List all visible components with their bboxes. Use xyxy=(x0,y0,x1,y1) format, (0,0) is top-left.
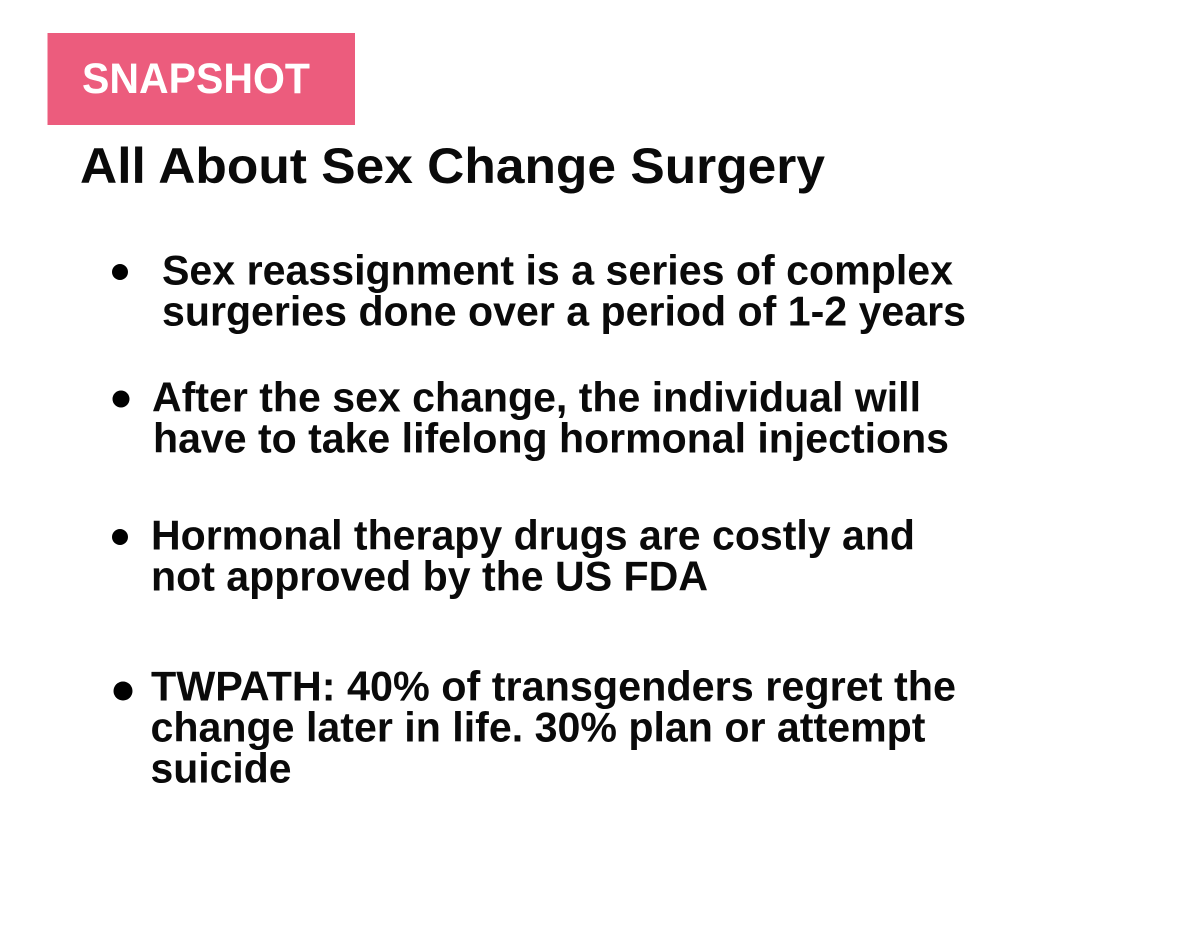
bullet point: TWPATH statistics: TWPATH: 40% of transgenders regret the xyxy=(151,662,956,710)
badge: snapshot: SNAPSHOT xyxy=(82,55,310,103)
bullet point: hormonal therapy drugs: not approved by the US FDA xyxy=(151,552,708,600)
bullet point: TWPATH statistics: change later in life. 30% plan or attempt xyxy=(150,704,926,750)
bullet point: lifelong hormonal injections xyxy=(112,374,949,462)
title: All About Sex Change Surgery xyxy=(80,138,825,194)
bullet point: lifelong hormonal injections: have to take lifelong hormonal injections xyxy=(153,414,949,462)
bullet point: series of surgeries xyxy=(112,246,966,334)
bullet point: lifelong hormonal injections: After the sex change, the individual will xyxy=(152,374,921,420)
bullet point: TWPATH statistics: suicide xyxy=(150,744,292,792)
bullet point: hormonal therapy drugs xyxy=(112,512,915,600)
bullet point: series of surgeries: Sex reassignment is a series of complex xyxy=(162,246,953,294)
badge: snapshot xyxy=(48,33,355,125)
bullet point: hormonal therapy drugs: Hormonal therapy drugs are costly and xyxy=(151,512,915,558)
bullet point: series of surgeries: surgeries done over a period of 1-2 years xyxy=(162,288,966,334)
bullet point: TWPATH statistics xyxy=(114,662,956,792)
